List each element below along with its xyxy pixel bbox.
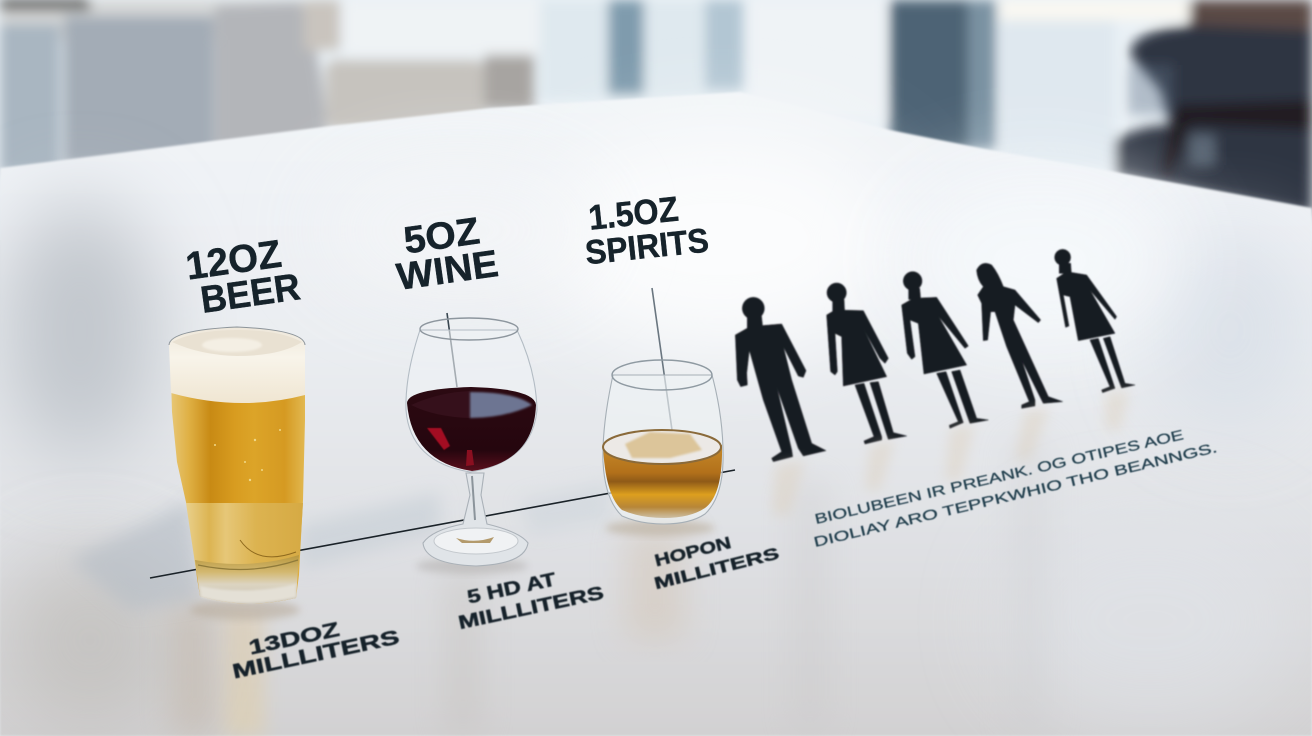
glass shadows [70, 480, 715, 620]
caption under wine [452, 560, 606, 633]
wine glass [406, 318, 537, 566]
figure 4: woman with long hair [977, 263, 1063, 408]
descriptive text block: BIOLUBEEN IR PREANK. OG OTIPES AOE [813, 426, 1185, 527]
pointer line: spirits [652, 288, 672, 430]
beer glass [169, 327, 305, 604]
caption under wine: MILLLITERS [457, 583, 606, 633]
title: 12oz beer: BEER [198, 266, 303, 322]
caption under beer [226, 607, 401, 683]
title: 12oz beer [183, 231, 303, 323]
caption under spirits: HOPON [653, 533, 733, 570]
caption under beer: MILLLITERS [231, 627, 401, 683]
caption under spirits [647, 522, 781, 593]
descriptive text block [812, 426, 1219, 550]
caption under spirits: MILLITERS [652, 544, 781, 593]
baseline rule [150, 470, 735, 578]
title: 5oz wine [389, 208, 501, 299]
figure 5: woman in dress [1055, 249, 1135, 393]
silhouettes of five people [735, 249, 1135, 462]
title: 1.5oz spirits: 1.5OZ [587, 190, 680, 238]
figure 1: man [735, 297, 826, 462]
title: 5oz wine: 5OZ [401, 210, 482, 263]
caption under wine: 5 HD AT [465, 569, 558, 608]
caption under beer: 13DOZ [247, 619, 342, 660]
title: 5oz wine: WINE [394, 243, 501, 299]
descriptive text block: DIOLIAY ARO TEPPKWHIO THO BEANNGS. [812, 439, 1219, 550]
background room [0, 0, 1312, 240]
figure 2: woman in dress [827, 283, 907, 444]
silhouette reflections [772, 390, 1130, 515]
reflection streaks [170, 440, 1050, 736]
figure 3: woman in dress [902, 272, 988, 428]
title: 1.5oz spirits: SPIRITS [583, 222, 711, 272]
title: 12oz beer: 12OZ [183, 233, 284, 289]
whisky glass [603, 360, 723, 524]
title: 1.5oz spirits [580, 187, 711, 272]
pointer line: wine [447, 313, 457, 387]
